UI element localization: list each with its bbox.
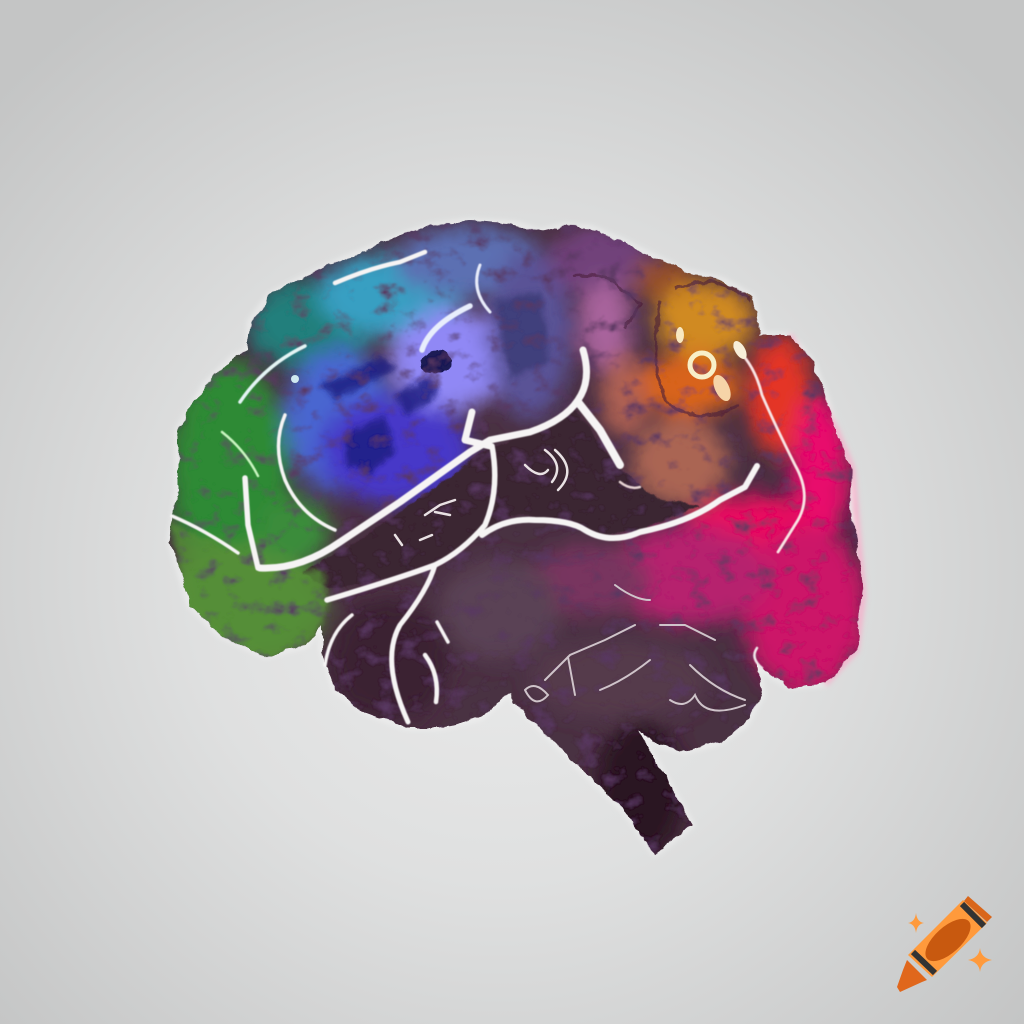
brain halo (170, 221, 863, 854)
crayon label (918, 912, 978, 968)
fine marks in cerebellum (525, 585, 745, 711)
dark creases in blue lobe (320, 290, 550, 475)
white sulci lines (172, 252, 804, 722)
crayon tip (897, 960, 927, 992)
crayon cap (964, 896, 992, 922)
dark temporal band (300, 410, 700, 590)
dark fold lines in upper lobes (575, 274, 750, 416)
crayon body (908, 900, 987, 977)
crayon bands (913, 904, 984, 973)
icon: crayon logo (897, 896, 992, 992)
dark spot (421, 351, 453, 373)
highlight marks (291, 327, 749, 404)
brain illustration (150, 200, 880, 870)
sparkle large (968, 948, 992, 972)
sparkle small (908, 913, 924, 933)
green lower lobe shade (170, 520, 325, 656)
fine marks in temporal band (395, 450, 567, 545)
coloured brain lobes (150, 200, 880, 870)
colour wash (155, 226, 867, 860)
